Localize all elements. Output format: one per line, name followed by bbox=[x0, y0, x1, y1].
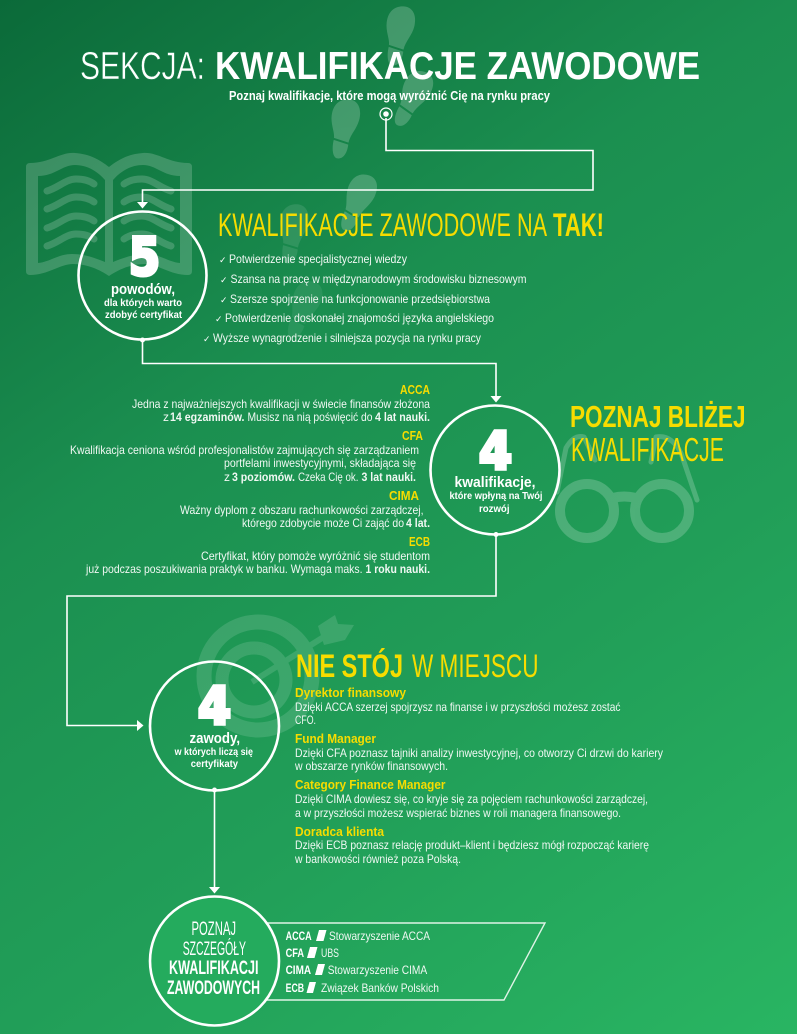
checklist: benefits: ✓ bbox=[220, 276, 228, 286]
professions caption: certyfikaty bbox=[191, 759, 238, 770]
heading: kwalifikacje na tak: TAK! bbox=[553, 207, 604, 243]
professions caption: zawody, bbox=[190, 730, 240, 747]
ECB: ECB bbox=[409, 534, 430, 549]
heading: kwalifikacje na tak: KWALIFIKACJE ZAWODOWE NA bbox=[218, 207, 547, 243]
CIMA bbox=[180, 488, 430, 530]
start marker bbox=[380, 108, 392, 120]
issuer: ECB bbox=[286, 981, 439, 995]
arrow: qualifications to professions bbox=[67, 532, 498, 731]
checklist: benefits: Wyższe wynagrodzenie i silniejsza pozycja na rynku pracy bbox=[213, 331, 481, 345]
panel: qualification descriptions bbox=[70, 382, 430, 576]
panel: professions list bbox=[294, 685, 663, 866]
panel: details circle: KWALIFIKACJI bbox=[169, 958, 258, 979]
profession: dyrektor finansowy bbox=[295, 685, 620, 727]
icon: target with arrow bbox=[204, 615, 354, 730]
arrow: start to reasons circle bbox=[137, 118, 593, 208]
checklist: benefits: ✓ bbox=[215, 315, 223, 325]
CIMA: którego zdobycie może Ci zająć do bbox=[242, 516, 404, 530]
checklist: benefits: Szansa na pracę w międzynarodowym środowisku biznesowym bbox=[230, 272, 526, 286]
icon: footprints bbox=[277, 5, 438, 343]
issuer: CFA: CFA bbox=[286, 946, 304, 960]
panel: details circle: ZAWODOWYCH bbox=[167, 978, 260, 999]
issuer: ECB: ECB bbox=[286, 981, 304, 995]
profession: dyrektor finansowy: CFO. bbox=[295, 713, 316, 727]
panel: details circle bbox=[150, 896, 279, 1026]
qualifications caption: kwalifikacje, bbox=[454, 474, 536, 491]
checklist: benefits: Potwierdzenie doskonałej znajomości języka angielskiego bbox=[225, 311, 494, 325]
CFA: portfelami inwestycyjnymi, składająca się bbox=[224, 456, 416, 470]
arrow: reasons to qualifications bbox=[140, 338, 502, 402]
panel: details circle: SZCZEGÓŁY bbox=[183, 938, 246, 960]
ECB bbox=[85, 534, 430, 576]
checklist: benefits: Potwierdzenie specjalistycznej wiedzy bbox=[229, 252, 407, 266]
CFA: 3 lat nauki. bbox=[362, 470, 416, 484]
professions caption bbox=[174, 730, 253, 770]
ECB: Certyfikat, który pomoże wyróżnić się studentom bbox=[201, 549, 430, 563]
CFA bbox=[70, 428, 423, 484]
issuer: ECB: Związek Banków Polskich bbox=[321, 981, 439, 995]
ACCA: 4 lat nauki. bbox=[375, 410, 430, 424]
ACCA: 14 egzaminów. bbox=[170, 410, 244, 424]
number four: 4 bbox=[479, 422, 512, 482]
reasons caption: powodów, bbox=[111, 281, 175, 298]
checklist: benefits: ✓ bbox=[220, 296, 228, 306]
panel: qualifications circle bbox=[430, 406, 560, 534]
icon: open book bbox=[26, 153, 192, 276]
qualifications caption bbox=[450, 474, 543, 515]
ACCA: ACCA bbox=[400, 382, 430, 397]
CFA: CFA bbox=[402, 428, 423, 443]
CFA: Czeka Cię ok. bbox=[298, 470, 358, 484]
issuer: CIMA: CIMA bbox=[286, 963, 311, 977]
issuer: CIMA: Stowarzyszenie CIMA bbox=[328, 963, 427, 977]
reasons caption: dla których warto bbox=[104, 298, 182, 309]
heading: poznaj bliżej kwalifikacje bbox=[570, 399, 746, 468]
profession: category finance manager bbox=[295, 777, 648, 820]
profession: dyrektor finansowy: Dzięki ACCA szerzej spojrzysz na finanse i w przyszłości możesz zostać bbox=[295, 700, 620, 714]
reasons caption: zdobyć certyfikat bbox=[105, 310, 183, 321]
issuer: CFA: UBS bbox=[321, 946, 339, 960]
checklist: benefits: ✓ bbox=[219, 256, 227, 266]
icon: glasses bbox=[557, 436, 697, 538]
heading: nie stój w miejscu bbox=[296, 648, 538, 684]
number five: 5 bbox=[129, 228, 160, 288]
profession: doradca klienta: Dzięki ECB poznasz relację produkt–klient i będziesz mógł rozpocząć karierę bbox=[295, 838, 649, 852]
issuer: ACCA: Stowarzyszenie ACCA bbox=[329, 929, 430, 943]
checklist: benefits bbox=[203, 252, 526, 345]
profession: dyrektor finansowy: Dyrektor finansowy bbox=[295, 685, 407, 700]
panel: details circle: POZNAJ bbox=[192, 919, 236, 940]
title: SEKCJA: bbox=[80, 45, 205, 88]
profession: category finance manager: Category Finance Manager bbox=[295, 777, 446, 792]
ACCA: Musisz na nią poświęcić do bbox=[248, 410, 373, 424]
checklist: benefits: ✓ bbox=[203, 335, 211, 345]
profession: doradca klienta: Doradca klienta bbox=[295, 824, 385, 839]
CIMA: CIMA bbox=[389, 488, 420, 503]
title: KWALIFIKACJE ZAWODOWE bbox=[215, 45, 700, 88]
ACCA: Jedna z najważniejszych kwalifikacji w świecie finansów złożona bbox=[132, 397, 430, 411]
reasons caption bbox=[104, 281, 183, 321]
ACCA: z bbox=[163, 410, 169, 424]
panel: reasons circle bbox=[78, 212, 206, 340]
panel: issuers parallelogram bbox=[262, 923, 545, 1000]
qualifications caption: które wpłyną na Twój bbox=[450, 491, 543, 502]
heading: nie stój w miejscu: W MIEJSCU bbox=[412, 648, 538, 684]
profession: doradca klienta: w bankowości również poza Polską. bbox=[294, 852, 461, 866]
issuer: ACCA: ACCA bbox=[286, 929, 312, 943]
profession: fund manager bbox=[294, 731, 663, 773]
subtitle: Poznaj kwalifikacje, które mogą wyróżnić Cię na rynku pracy bbox=[229, 88, 551, 103]
issuer: ACCA bbox=[286, 929, 430, 943]
profession: fund manager: w obszarze rynków finansowych. bbox=[294, 759, 448, 773]
CFA: z bbox=[224, 470, 230, 484]
issuer: CFA bbox=[286, 946, 339, 960]
qualifications caption: rozwój bbox=[479, 504, 510, 515]
CFA: 3 poziomów. bbox=[232, 470, 295, 484]
professions caption: w których liczą się bbox=[174, 747, 253, 758]
profession: fund manager: Fund Manager bbox=[295, 731, 376, 746]
ACCA bbox=[132, 382, 430, 424]
profession: doradca klienta bbox=[294, 824, 649, 866]
CIMA: Ważny dyplom z obszaru rachunkowości zarządczej, bbox=[180, 503, 424, 517]
CFA: Kwalifikacja ceniona wśród profesjonalistów zajmujących się zarządzaniem bbox=[70, 443, 419, 457]
CIMA: 4 lat. bbox=[406, 516, 430, 530]
checklist: benefits: Szersze spojrzenie na funkcjonowanie przedsiębiorstwa bbox=[230, 292, 490, 306]
number four: 4 bbox=[198, 677, 231, 737]
ECB: już podczas poszukiwania praktyk w banku. Wymaga maks. bbox=[85, 562, 363, 576]
profession: category finance manager: Dzięki CIMA dowiesz się, co kryje się za pojęciem rachunkowości zarządczej, bbox=[295, 792, 648, 806]
ECB: 1 roku nauki. bbox=[366, 562, 430, 576]
profession: category finance manager: a w przyszłości możesz wspierać biznes w roli managera finansowego. bbox=[295, 806, 621, 820]
arrow: professions to details bbox=[209, 788, 220, 894]
panel: professions circle bbox=[150, 662, 279, 790]
heading: nie stój w miejscu: NIE STÓJ bbox=[296, 648, 403, 684]
issuer: CIMA bbox=[286, 963, 427, 977]
profession: fund manager: Dzięki CFA poznasz tajniki analizy inwestycyjnej, co otworzy Ci drzwi do kariery bbox=[295, 746, 663, 760]
